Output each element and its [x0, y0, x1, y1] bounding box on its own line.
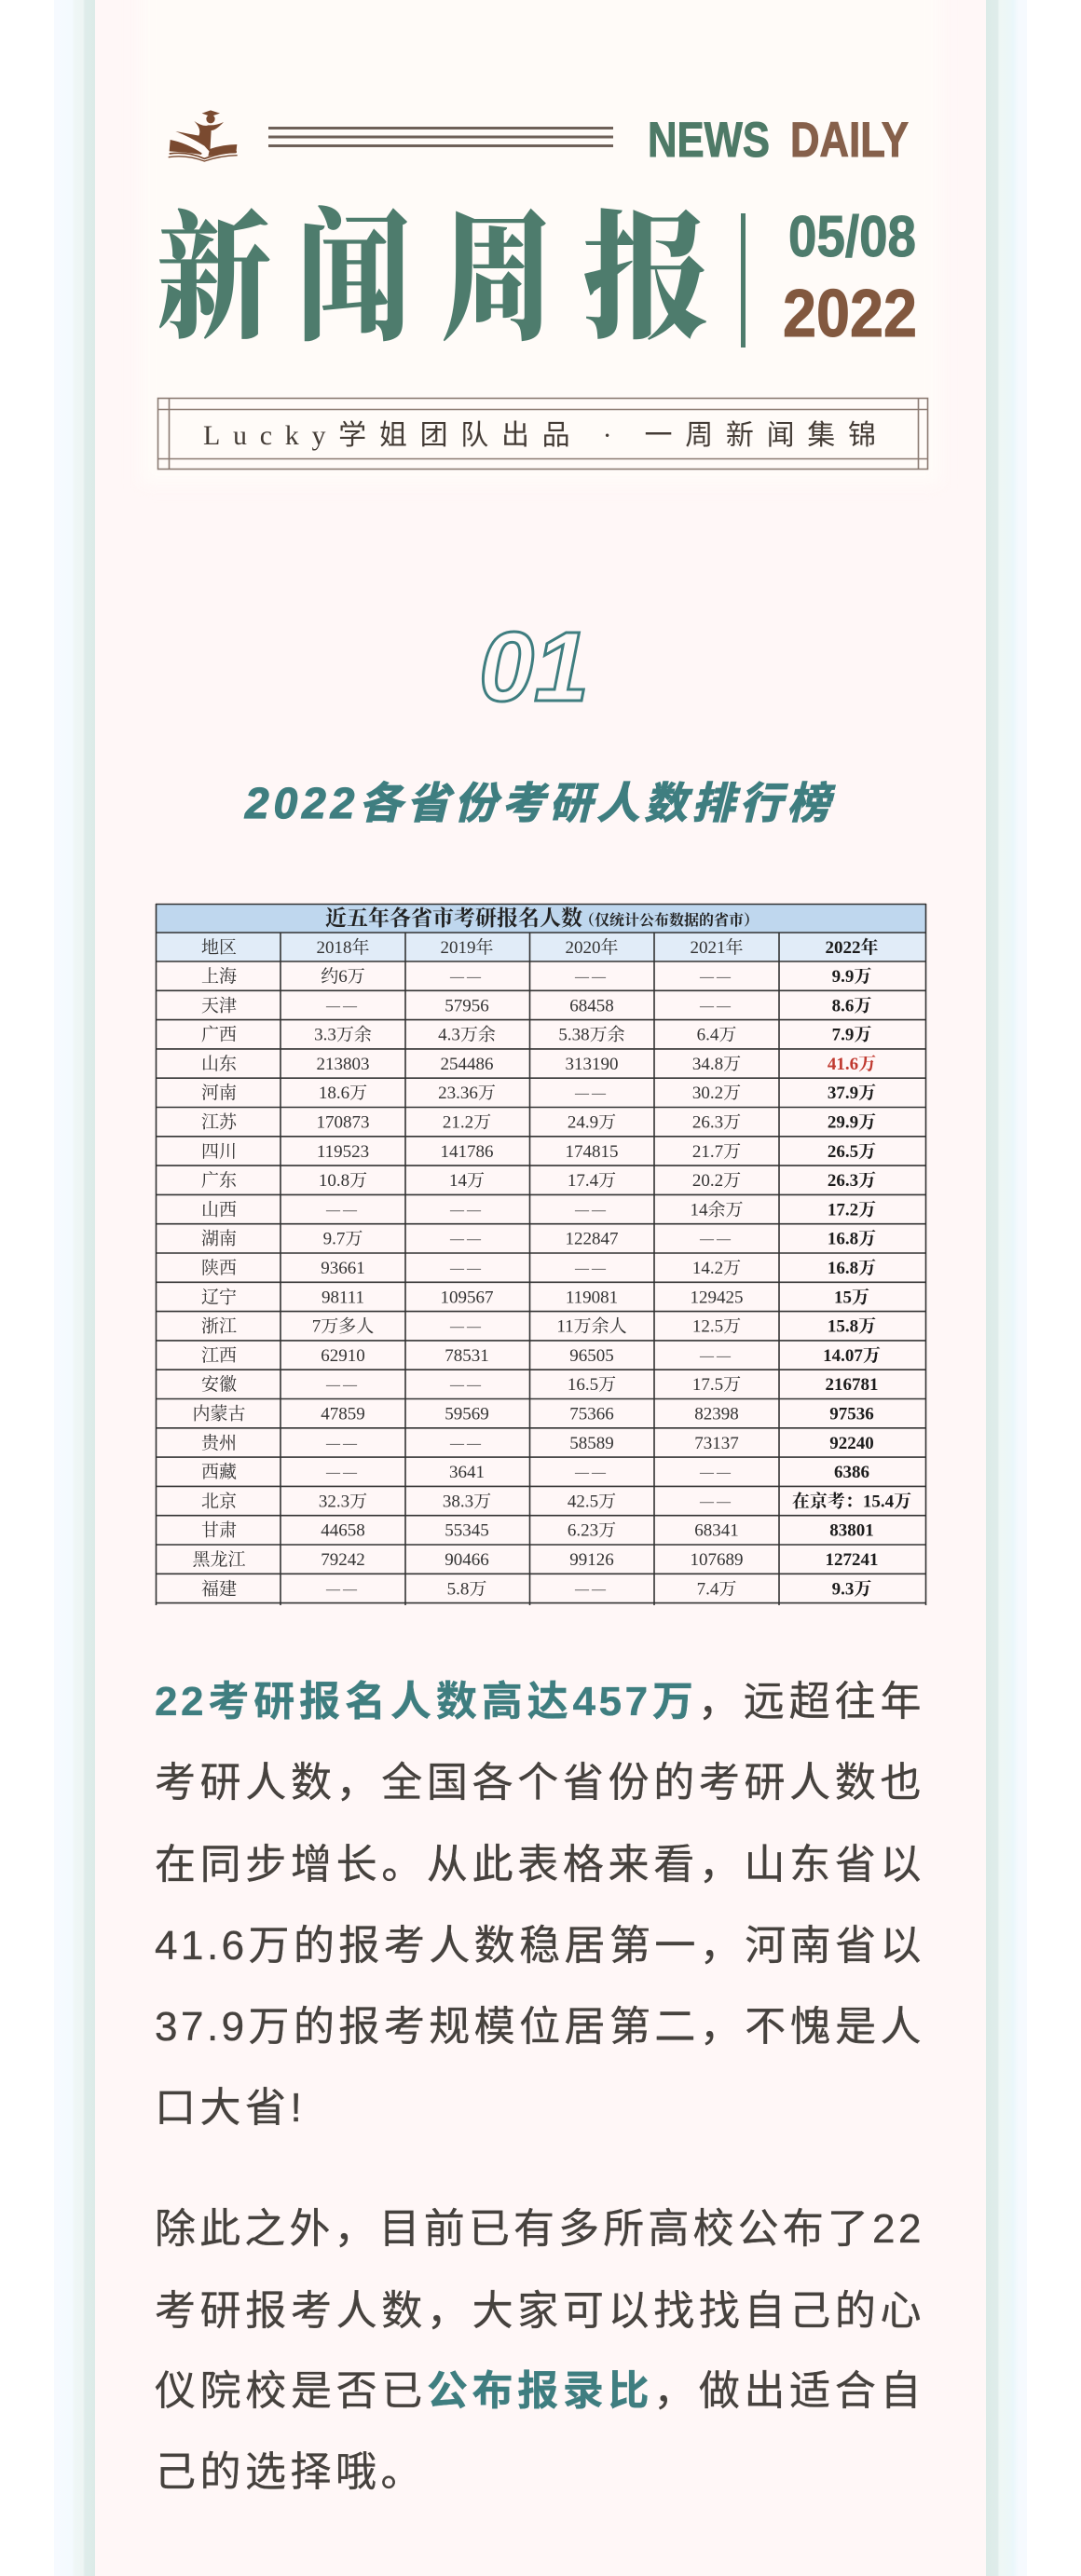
table rows: 14.07万 [823, 1345, 881, 1366]
table title row: （仅统计公布数据的省市） [580, 911, 759, 929]
table rows: 约6万 [321, 966, 365, 987]
table rows: 陕西 [201, 1258, 237, 1278]
paragraph 1: 考研人数，全国各个省份的考研人数也 [155, 1760, 924, 1806]
table rows: 7万多人 [312, 1316, 374, 1337]
table rows: 92240 [829, 1434, 874, 1453]
icon: book and graduate logo [169, 110, 238, 161]
table rows: 9.3万 [832, 1578, 871, 1599]
tagline text: Lucky学姐团队出品 · 一周新闻集锦 [203, 420, 876, 451]
paragraph 1: 在同步增长。从此表格来看，山东省以 [155, 1842, 924, 1888]
table rows: 57956 [445, 996, 489, 1015]
table rows: 四川 [201, 1142, 237, 1162]
table rows: 127241 [826, 1550, 878, 1570]
table rows: 17.4万 [568, 1171, 616, 1191]
table rows: 贵州 [201, 1433, 237, 1453]
table rows: 9.9万 [832, 966, 871, 987]
heading: NEWS DAILY: NEWS [648, 113, 770, 168]
section number 01: 01 [479, 612, 589, 722]
table rows: 天津 [201, 995, 237, 1015]
paragraph 1 [155, 1679, 924, 2131]
paragraph 2: 考研报考人数，大家可以找找自己的心 [155, 2288, 924, 2334]
table rows: 122847 [565, 1230, 619, 1249]
table rows: 73137 [694, 1434, 739, 1453]
paragraph 1: 口大省! [155, 2085, 306, 2131]
table rows: 江苏 [201, 1112, 238, 1133]
table rows: 141786 [440, 1142, 494, 1162]
table rows [192, 966, 911, 1599]
tagline frame [157, 398, 928, 470]
table rows: 16.8万 [828, 1229, 876, 1249]
table rows: 14.2万 [692, 1259, 741, 1278]
paragraph 1: 41.6万的报考人数稳居第一，河南省以 [155, 1923, 924, 1969]
table rows: —— [449, 1203, 484, 1218]
table rows: 20.2万 [692, 1171, 741, 1191]
table rows: 26.5万 [828, 1141, 876, 1162]
table rows: —— [325, 1378, 360, 1393]
right side band [986, 0, 1027, 2576]
table rows: —— [699, 1233, 733, 1247]
table rows: 32.3万 [319, 1492, 367, 1511]
table rows: 9.7万 [323, 1230, 363, 1249]
table rows: 30.2万 [692, 1084, 741, 1103]
data table [155, 904, 926, 1605]
table rows: 14余万 [690, 1199, 744, 1220]
table rows: —— [325, 1465, 360, 1480]
table rows: 16.5万 [568, 1375, 616, 1395]
table rows: 湖南 [201, 1229, 237, 1249]
table rows: 99126 [569, 1550, 614, 1570]
title: 新闻周报: 报 [582, 167, 709, 366]
table rows: 93661 [321, 1259, 365, 1278]
table rows: 170873 [317, 1112, 369, 1133]
decorative triple rule [268, 129, 613, 145]
table rows: 上海 [201, 966, 237, 987]
table rows: 213803 [317, 1055, 369, 1074]
table rows: 18.6万 [319, 1084, 367, 1103]
year: 2022: 2022 [783, 277, 917, 351]
table rows: 3.3万余 [314, 1025, 372, 1045]
table rows: 44658 [321, 1521, 365, 1541]
paragraph 2: 仪院校是否已公布报录比，做出适合自 [155, 2368, 924, 2414]
table rows: 26.3万 [692, 1112, 741, 1133]
table rows: —— [574, 1582, 609, 1597]
table rows: 68458 [569, 996, 614, 1015]
table rows: 254486 [440, 1055, 494, 1074]
table rows: 11万余人 [556, 1316, 627, 1337]
table rows: 山西 [201, 1199, 237, 1220]
table header row [156, 933, 926, 961]
table rows: —— [449, 970, 484, 985]
table rows: —— [449, 1261, 484, 1276]
table rows: 55345 [445, 1521, 489, 1541]
table rows: 8.6万 [832, 995, 871, 1015]
table rows: 安徽 [201, 1374, 237, 1395]
table rows: —— [449, 1320, 484, 1335]
table rows: 3641 [449, 1463, 485, 1482]
table rows: 98111 [322, 1288, 364, 1307]
table rows: 37.9万 [828, 1083, 876, 1103]
table rows: 79242 [321, 1550, 365, 1570]
table rows: 26.3万 [828, 1170, 876, 1191]
table rows: 129425 [690, 1288, 744, 1307]
table rows: 西藏 [201, 1462, 237, 1482]
table rows: 7.4万 [697, 1579, 736, 1599]
table rows: 江西 [201, 1345, 237, 1366]
paragraph 1: 22考研报名人数高达457万，远超往年 [155, 1679, 924, 1724]
table rows: 216781 [826, 1375, 878, 1395]
table rows: 4.3万余 [438, 1025, 496, 1045]
table rows: 福建 [201, 1578, 237, 1599]
table rows: 29.9万 [828, 1112, 876, 1133]
table rows: 82398 [694, 1405, 739, 1424]
heading: NEWS DAILY [648, 113, 909, 168]
table rows: —— [699, 970, 733, 985]
table rows: 6.4万 [697, 1026, 736, 1045]
table rows: 59569 [445, 1405, 489, 1424]
table rows: 90466 [445, 1550, 489, 1570]
table rows: —— [574, 1465, 609, 1480]
left side band [54, 0, 95, 2576]
table rows: 黑龙江 [192, 1549, 246, 1570]
table rows: 14万 [449, 1171, 485, 1191]
table rows: 15万 [834, 1287, 869, 1307]
table rows: 24.9万 [568, 1112, 616, 1133]
table rows: 7.9万 [832, 1025, 871, 1045]
table rows: 17.2万 [828, 1199, 876, 1220]
table rows: —— [449, 1233, 484, 1247]
table rows: —— [325, 999, 360, 1014]
table rows: 5.8万 [447, 1579, 486, 1599]
table rows: 68341 [694, 1521, 739, 1541]
section header [244, 612, 836, 827]
table rows: 41.6万 [828, 1054, 876, 1074]
vertical divider [741, 213, 746, 348]
table rows: 58589 [569, 1434, 614, 1453]
table rows: 21.7万 [692, 1142, 741, 1162]
table rows: 16.8万 [828, 1258, 876, 1278]
table rows: 甘肃 [201, 1520, 237, 1541]
table rows: 78531 [445, 1346, 489, 1366]
table rows: 山东 [201, 1054, 237, 1074]
table header row: 2022年 [825, 936, 879, 958]
table rows: 辽宁 [201, 1287, 237, 1307]
paragraph 2 [155, 2206, 924, 2495]
table rows: 6.23万 [568, 1521, 616, 1541]
table rows: —— [699, 1494, 733, 1509]
table rows: 浙江 [201, 1316, 237, 1337]
masthead [157, 110, 928, 470]
table header row: 地区 [201, 937, 237, 958]
table rows: 96505 [569, 1346, 614, 1366]
table rows: 河南 [201, 1083, 237, 1103]
table rows: 97536 [829, 1405, 874, 1424]
table rows: 广西 [201, 1025, 237, 1045]
table rows: —— [699, 1465, 733, 1480]
table rows: 119523 [317, 1142, 369, 1162]
table header row: 2018年 [316, 937, 370, 958]
table title row: 近五年各省市考研报名人数 [325, 906, 582, 930]
table rows: 107689 [690, 1550, 744, 1570]
table rows: 75366 [569, 1405, 614, 1424]
table rows: 119081 [566, 1288, 618, 1307]
table rows: 313190 [565, 1055, 619, 1074]
table rows: 17.5万 [692, 1375, 741, 1395]
table rows: —— [574, 1086, 609, 1101]
table rows: 38.3万 [443, 1492, 491, 1511]
table grid [156, 904, 926, 1605]
table rows: 12.5万 [692, 1317, 741, 1337]
table rows: —— [449, 1437, 484, 1452]
table title row [156, 904, 926, 933]
table header row: 2021年 [690, 937, 744, 958]
header background [140, 0, 941, 484]
table rows: 34.8万 [692, 1055, 741, 1074]
table rows: —— [699, 1349, 733, 1364]
table rows: 6386 [834, 1463, 869, 1482]
title: 新闻周报: 周 [440, 164, 555, 369]
paragraph 1: 37.9万的报考规模位居第二，不愧是人 [155, 2004, 924, 2050]
title: 新闻周报 [157, 164, 709, 369]
table rows: 23.36万 [438, 1084, 496, 1103]
table rows: 内蒙古 [192, 1403, 246, 1424]
table rows: 42.5万 [568, 1492, 616, 1511]
table rows: 广东 [201, 1170, 237, 1191]
title: 新闻周报: 闻 [297, 164, 413, 369]
title: 新闻周报: 新 [157, 169, 271, 366]
table header row: 2020年 [565, 937, 619, 958]
table rows: 47859 [321, 1405, 365, 1424]
table rows: 109567 [440, 1288, 494, 1307]
table rows: —— [699, 999, 733, 1014]
table rows: —— [574, 1261, 609, 1276]
date: 05/08: 05/08 [788, 205, 916, 269]
table rows: 在京考：15.4万 [792, 1490, 911, 1511]
table rows: 62910 [321, 1346, 365, 1366]
section heading: 2022各省份考研人数排行榜 [244, 779, 835, 827]
paragraph 2: 己的选择哦。 [155, 2449, 426, 2495]
table rows: —— [325, 1437, 360, 1452]
table rows: —— [325, 1203, 360, 1218]
table rows: —— [574, 970, 609, 985]
table rows: —— [574, 1203, 609, 1218]
table header row: 2019年 [440, 937, 494, 958]
table rows: 15.8万 [828, 1316, 876, 1337]
paragraph 2: 除此之外，目前已有多所高校公布了22 [155, 2206, 924, 2252]
table rows: 5.38万余 [558, 1025, 625, 1045]
heading: NEWS DAILY: DAILY [790, 113, 909, 168]
table rows: 北京 [201, 1491, 237, 1511]
table rows: 83801 [829, 1521, 874, 1541]
table rows: —— [449, 1378, 484, 1393]
table rows: —— [325, 1582, 360, 1597]
table rows: 10.8万 [319, 1171, 367, 1191]
table rows: 174815 [565, 1142, 619, 1162]
table rows: 21.2万 [443, 1112, 491, 1133]
